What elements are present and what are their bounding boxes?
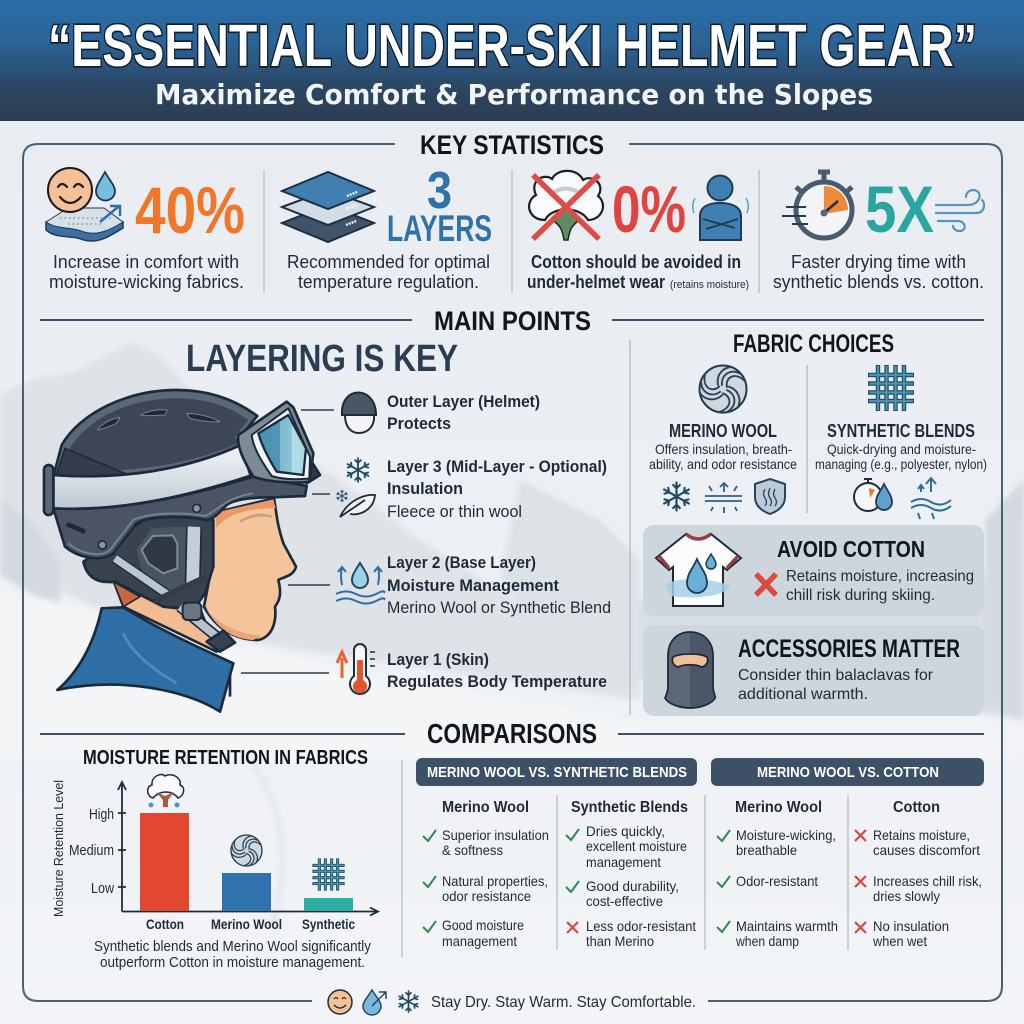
neck xyxy=(113,580,217,652)
helmet dome xyxy=(53,390,257,477)
text: Layer 2 (Base Layer) xyxy=(387,553,536,572)
icon: helmet xyxy=(342,392,376,433)
merino wool text: MERINO WOOL xyxy=(669,421,777,441)
icon: damp t-shirt xyxy=(656,534,741,606)
bar: synthetic xyxy=(304,898,353,911)
column: synthetic blends: Good durability, xyxy=(586,878,679,894)
synthetic blends text: SYNTHETIC BLENDS xyxy=(827,421,975,441)
body text: Consider thin balaclavas for xyxy=(738,667,934,684)
stat: 40 percent comfort xyxy=(46,168,245,292)
heading: key statistics: KEY STATISTICS xyxy=(420,130,604,160)
panel: fabric choices xyxy=(649,330,987,519)
column: synthetic blends: Less odor-resistant xyxy=(586,918,696,934)
caption: temperature regulation. xyxy=(298,272,479,292)
heading: main points: MAIN POINTS xyxy=(434,306,591,336)
icon: moisture waves xyxy=(911,478,951,519)
header banner xyxy=(0,0,1024,121)
icon: smiley with moisture-wicking fabric xyxy=(46,168,123,241)
text: Protects xyxy=(387,414,451,433)
value: 3 xyxy=(427,162,452,220)
stat: 5X faster drying xyxy=(773,172,984,292)
text xyxy=(387,392,540,433)
subtitle: Maximize Comfort & Performance on the Slopes xyxy=(155,78,873,111)
chart title: MOISTURE RETENTION IN FABRICS xyxy=(83,747,368,769)
column: merino wool: Natural properties, xyxy=(442,873,548,889)
icon: stopwatch xyxy=(782,172,852,238)
comparison: merino wool vs cotton xyxy=(711,758,984,949)
header pill xyxy=(416,758,697,786)
heading: layering is key: LAYERING IS KEY xyxy=(186,338,458,380)
column: cotton: Increases chill risk, xyxy=(873,873,982,889)
icon: cotton boll xyxy=(148,774,184,808)
y axis labels xyxy=(69,806,114,897)
column: synthetic blends: Synthetic Blends xyxy=(571,799,688,816)
merino wool text: Offers insulation, breath- xyxy=(655,441,792,457)
layer: outer helmet xyxy=(342,392,540,433)
text: Insulation xyxy=(387,479,463,498)
text xyxy=(387,457,607,521)
value: 5X xyxy=(865,172,934,246)
heading: AVOID COTTON xyxy=(777,536,925,562)
caption: Faster drying time with xyxy=(791,252,966,272)
text xyxy=(387,553,611,617)
icon: snowflake xyxy=(664,482,689,511)
column: merino wool: management xyxy=(442,933,517,949)
footer tagline xyxy=(328,990,696,1015)
icon: wool xyxy=(227,835,262,870)
header pill: MERINO WOOL VS. SYNTHETIC BLENDS xyxy=(427,764,687,781)
column: merino wool xyxy=(423,799,549,949)
column: merino wool: Maintains warmth xyxy=(736,918,838,934)
icon: stacked layers xyxy=(282,172,374,242)
caption xyxy=(287,252,490,292)
y axis labels: Low xyxy=(91,880,114,897)
body text xyxy=(738,667,934,703)
bar: merino wool xyxy=(222,873,271,911)
body text: additional warmth. xyxy=(738,686,868,703)
column: cotton: Retains moisture, xyxy=(873,827,970,843)
value: 40% xyxy=(135,173,245,247)
icon: balaclava xyxy=(665,632,715,708)
helmet straps xyxy=(115,558,168,595)
bar: cotton xyxy=(140,813,189,911)
heading: comparisons: COMPARISONS xyxy=(427,718,597,749)
column: cotton xyxy=(855,799,982,949)
panel: accessories matter xyxy=(643,625,984,716)
comparison: merino wool vs synthetic blends xyxy=(416,758,697,949)
column: merino wool: Merino Wool xyxy=(735,799,822,816)
text: Moisture Management xyxy=(387,576,559,595)
merino wool text xyxy=(649,421,797,472)
icon: snowflake xyxy=(399,991,418,1012)
caption: Synthetic blends and Merino Wool significantly xyxy=(94,938,371,955)
illustration: head with helmet and goggles xyxy=(44,390,320,712)
column: merino wool: when damp xyxy=(735,933,799,949)
icon: wind xyxy=(936,190,984,231)
column: synthetic blends: excellent moisture xyxy=(586,838,687,854)
column: synthetic blends xyxy=(566,799,696,949)
icon: thermometer and arrow xyxy=(337,644,375,694)
column: cotton: dries slowly xyxy=(873,888,940,904)
icon: breathability arrows xyxy=(705,483,742,513)
body text: Retains moisture, increasing xyxy=(786,568,974,585)
layer 3: mid-layer xyxy=(337,457,607,521)
x labels: Cotton xyxy=(146,916,184,932)
icon: moisture and waves xyxy=(336,563,384,604)
text xyxy=(387,650,607,691)
caption: Cotton should be avoided in xyxy=(531,252,741,272)
value: LAYERS xyxy=(387,208,492,249)
face xyxy=(204,498,296,640)
body text xyxy=(786,568,974,604)
text: Merino Wool or Synthetic Blend xyxy=(387,598,611,617)
merino wool text: ability, and odor resistance xyxy=(649,456,797,472)
caption: moisture-wicking fabrics. xyxy=(49,272,244,292)
goggles xyxy=(300,443,320,483)
x labels: Merino Wool xyxy=(211,916,282,932)
layer 2: base layer xyxy=(336,553,611,617)
caption xyxy=(527,252,749,292)
header pill: MERINO WOOL VS. COTTON xyxy=(757,764,939,781)
axes xyxy=(118,782,378,916)
text: Layer 3 (Mid-Layer - Optional) xyxy=(387,457,607,476)
caption: Recommended for optimal xyxy=(287,252,490,272)
column: merino wool xyxy=(717,799,838,949)
icon: drop with arrow xyxy=(363,990,386,1015)
header pill xyxy=(711,758,984,786)
panel: avoid cotton xyxy=(643,525,984,616)
caption: outperform Cotton in moisture management. xyxy=(100,954,365,971)
icon: wool ball xyxy=(693,366,746,419)
icon: smiley xyxy=(328,990,352,1014)
icon: odor shield xyxy=(755,479,785,514)
column: merino wool: odor resistance xyxy=(442,888,531,904)
synthetic blends text xyxy=(815,421,987,472)
helmet band xyxy=(53,445,251,509)
icon: red x xyxy=(756,574,776,595)
column: merino wool: Moisture-wicking, xyxy=(736,827,836,843)
caption xyxy=(773,252,984,292)
column: synthetic blends: management xyxy=(586,854,661,870)
column: synthetic blends: Dries quickly, xyxy=(586,823,665,839)
stat: 3 layers xyxy=(282,162,492,292)
caption: Increase in comfort with xyxy=(53,252,239,272)
caption: under-helmet wear xyxy=(527,272,665,292)
body text: chill risk during skiing. xyxy=(786,587,935,604)
icon: stopwatch and drop xyxy=(854,479,892,511)
column: synthetic blends: than Merino xyxy=(586,933,654,949)
y axis title: Moisture Retention Level xyxy=(51,780,66,917)
helmet lower shell xyxy=(53,477,307,558)
jacket xyxy=(57,607,233,712)
rear ear unit xyxy=(83,513,213,610)
x labels xyxy=(146,916,355,932)
text: Regulates Body Temperature xyxy=(387,672,607,691)
x labels: Synthetic xyxy=(302,916,355,932)
column: synthetic blends: cost-effective xyxy=(586,893,663,909)
column: cotton: No insulation xyxy=(873,918,949,934)
text: Layer 1 (Skin) xyxy=(387,650,489,669)
heading: fabric choices: FABRIC CHOICES xyxy=(733,330,894,358)
icon: weave xyxy=(312,858,345,891)
caption: (retains moisture) xyxy=(670,279,749,291)
bar chart: moisture retention xyxy=(51,747,378,971)
icon: synthetic weave xyxy=(868,365,914,411)
caption xyxy=(94,938,371,971)
caption xyxy=(49,252,244,292)
column: merino wool: Merino Wool xyxy=(442,799,529,816)
caption: synthetic blends vs. cotton. xyxy=(773,272,984,292)
y axis labels: Medium xyxy=(69,842,114,859)
icon: crossed-out cotton xyxy=(529,171,603,240)
column: cotton: Cotton xyxy=(893,799,940,816)
column: cotton: when wet xyxy=(872,933,927,949)
synthetic blends text: managing (e.g., polyester, nylon) xyxy=(815,456,987,472)
icon: chilled person xyxy=(693,176,748,240)
text: Stay Dry. Stay Warm. Stay Comfortable. xyxy=(431,994,696,1011)
column: cotton: causes discomfort xyxy=(873,842,980,858)
text: Fleece or thin wool xyxy=(387,502,522,521)
column: merino wool: Good moisture xyxy=(442,917,524,933)
value xyxy=(387,162,492,249)
column: merino wool: Superior insulation xyxy=(442,827,549,843)
synthetic blends text: Quick-drying and moisture- xyxy=(827,441,976,457)
column: merino wool: Odor-resistant xyxy=(736,873,818,889)
y axis labels: High xyxy=(89,806,114,823)
layer 1: skin xyxy=(337,644,607,694)
text: Outer Layer (Helmet) xyxy=(387,392,540,411)
icon: snowflakes and feather xyxy=(337,458,375,517)
value: 0% xyxy=(612,172,686,246)
column: merino wool: & softness xyxy=(442,842,503,858)
column: merino wool: breathable xyxy=(736,842,797,858)
heading: ACCESSORIES MATTER xyxy=(738,635,960,663)
stat: 0 percent cotton xyxy=(527,171,749,292)
